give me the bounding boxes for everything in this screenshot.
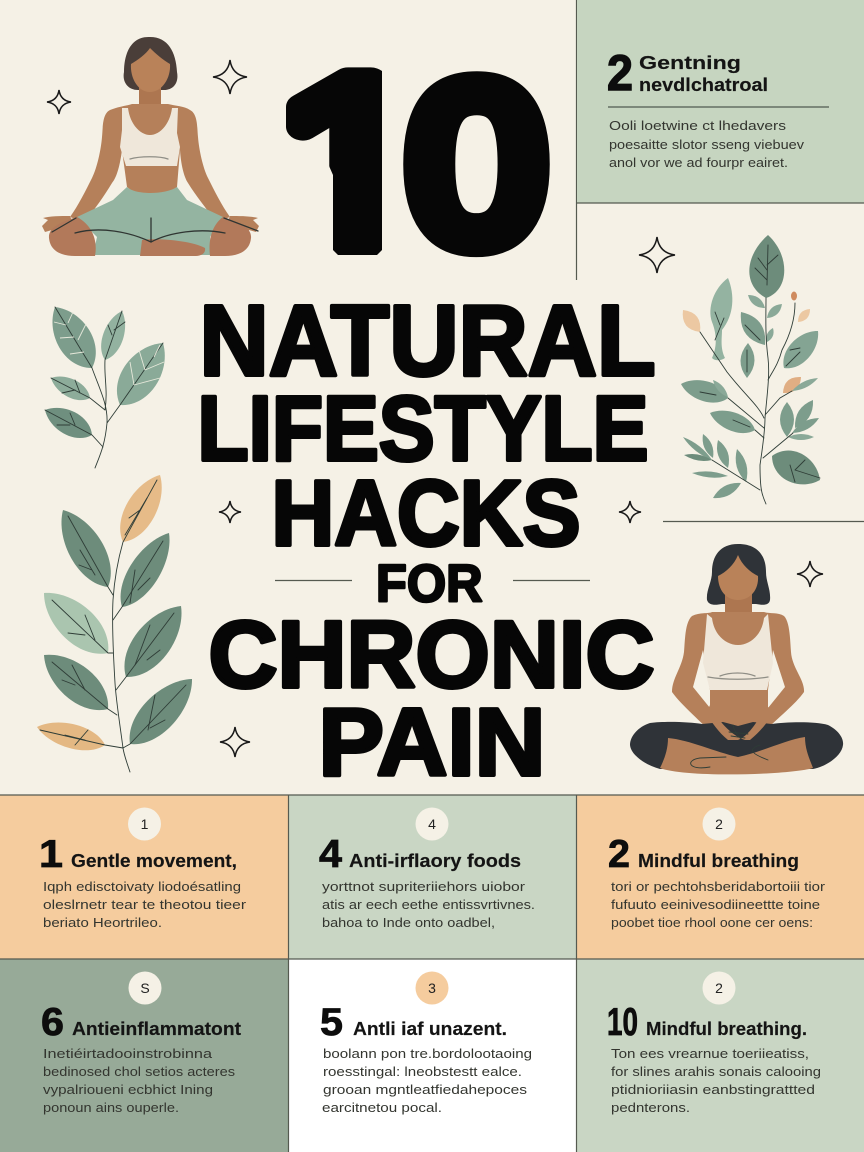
panel heading: [639, 53, 768, 95]
card 1: gentle movement: 1: [39, 833, 63, 876]
big number 10: [286, 67, 550, 258]
card 10: mindful breathing: for slines arahis sonais calooing: [611, 1064, 821, 1079]
icon: meditating woman, top left: [42, 37, 259, 256]
card 6: antiinflammatory: 6: [41, 1001, 64, 1044]
card 1: gentle movement: Iqph edisctoivaty liodoésatling: [43, 879, 241, 894]
icon: sparkle stars: [47, 60, 823, 757]
card 1: gentle movement: beriato Heortrileo.: [43, 915, 162, 930]
number 2: 2: [607, 45, 633, 101]
panel heading: Gentning: [639, 53, 741, 73]
panel body text: Ooli loetwine ct lhedavers: [609, 118, 787, 133]
card 6: antiinflammatory: Antieinflammatont: [72, 1019, 241, 1039]
card 2: mindful breathing: [576, 795, 864, 959]
badge S: S: [140, 980, 150, 996]
icon: small plant, left: [45, 307, 165, 468]
card 4: anti-inflammatory foods: [288, 795, 576, 959]
badge S: [128, 972, 162, 1004]
card 4: anti-inflammatory foods: 4: [319, 833, 342, 876]
panel: bottom grid: [0, 795, 864, 1152]
big number 10: 0: [409, 40, 544, 289]
badge 4: 4: [428, 816, 436, 832]
card 4: anti-inflammatory foods: Anti-irflaory foods: [349, 851, 521, 871]
badge 2: 2: [715, 816, 723, 832]
card 10: mindful breathing: Ton ees vrearnue toeriieatiss,: [611, 1046, 809, 1061]
panel body text: anol vor we ad fourpr eairet.: [609, 155, 788, 170]
card 5: roesstingal: lneobstestt ealce.: [323, 1064, 522, 1079]
panel: top-right tip: [576, 0, 864, 203]
panel heading: nevdlchatroal: [639, 75, 768, 95]
card 6: antiinflammatory: vypalrioueni ecbhict Ining: [43, 1082, 213, 1097]
card 1: gentle movement: Gentle movement,: [71, 851, 237, 871]
card 10: mindful breathing: 10: [607, 1001, 638, 1044]
big number 10: 1: [276, 32, 431, 291]
panel body text: [609, 118, 805, 170]
card 2: mindful breathing: 2: [608, 833, 630, 876]
title line: Chronic: CHRONIC: [208, 602, 654, 708]
card 10: mindful breathing: [576, 959, 864, 1152]
card 5: earcitnetou pocal.: [322, 1100, 442, 1115]
title line: Hacks: HACKS: [272, 461, 580, 565]
badge 2: 2: [715, 980, 723, 996]
card 5: 5: [320, 1001, 343, 1044]
card 10: mindful breathing: Mindful breathing.: [646, 1019, 807, 1039]
card 6: antiinflammatory: [0, 959, 288, 1152]
card 4: anti-inflammatory foods: yorttnot supriteriiehors uiobor: [322, 879, 526, 894]
title: [198, 32, 656, 796]
card 1: gentle movement: oleslrnetr tear te theotou tieer: [43, 897, 247, 912]
card 4: anti-inflammatory foods: atis ar eech eethe entissvrtivnes.: [322, 897, 535, 912]
badge 3: [416, 972, 448, 1004]
card 4: anti-inflammatory foods: bahoa to Inde onto oadbel,: [322, 915, 495, 930]
badge 3: 3: [428, 980, 436, 996]
icon: herb sprig, right: [681, 235, 820, 504]
card 5: Antli iaf unazent.: [353, 1019, 507, 1039]
title line: Natural: NATURAL: [200, 285, 656, 397]
title line: Pain: PAIN: [318, 689, 546, 796]
badge 2: [702, 808, 736, 840]
card 2: mindful breathing: tori or pechtohsberidabortoiii tior: [611, 879, 826, 894]
title line: For: FOR: [376, 554, 482, 614]
badge 2: [702, 972, 736, 1004]
card 5: boolann pon tre.bordolootaoing: [323, 1046, 532, 1061]
title line: Lifestyle: LIFESTYLE: [198, 378, 648, 480]
card 6: antiinflammatory: Inetiéirtadooinstrobinna: [43, 1046, 213, 1061]
badge 4: [416, 808, 448, 840]
card 1: gentle movement: [0, 795, 288, 959]
icon: seated woman, right: [630, 544, 843, 774]
icon: large plant with orange leaves, left: [37, 475, 192, 772]
card 5: [288, 959, 576, 1152]
card 6: antiinflammatory: bedinosed chol setios acteres: [43, 1064, 236, 1079]
badge 1: 1: [141, 816, 149, 832]
card 10: mindful breathing: pednterons.: [611, 1100, 690, 1115]
card 5: grooan mgntleatfiedahepoces: [323, 1082, 528, 1097]
panel body text: poesaitte slotor sseng viebuev: [609, 137, 805, 152]
card 10: mindful breathing: ptidnioriiasin eanbstingrattted: [611, 1082, 815, 1097]
badge 1: [128, 808, 161, 840]
card 2: mindful breathing: poobet tioe rhool oone cer oens:: [611, 915, 813, 930]
card 2: mindful breathing: fufuuto eeinivesodiineettte toine: [611, 897, 820, 912]
card 6: antiinflammatory: ponoun ains ouperle.: [43, 1100, 179, 1115]
card 2: mindful breathing: Mindful breathing: [638, 851, 799, 871]
